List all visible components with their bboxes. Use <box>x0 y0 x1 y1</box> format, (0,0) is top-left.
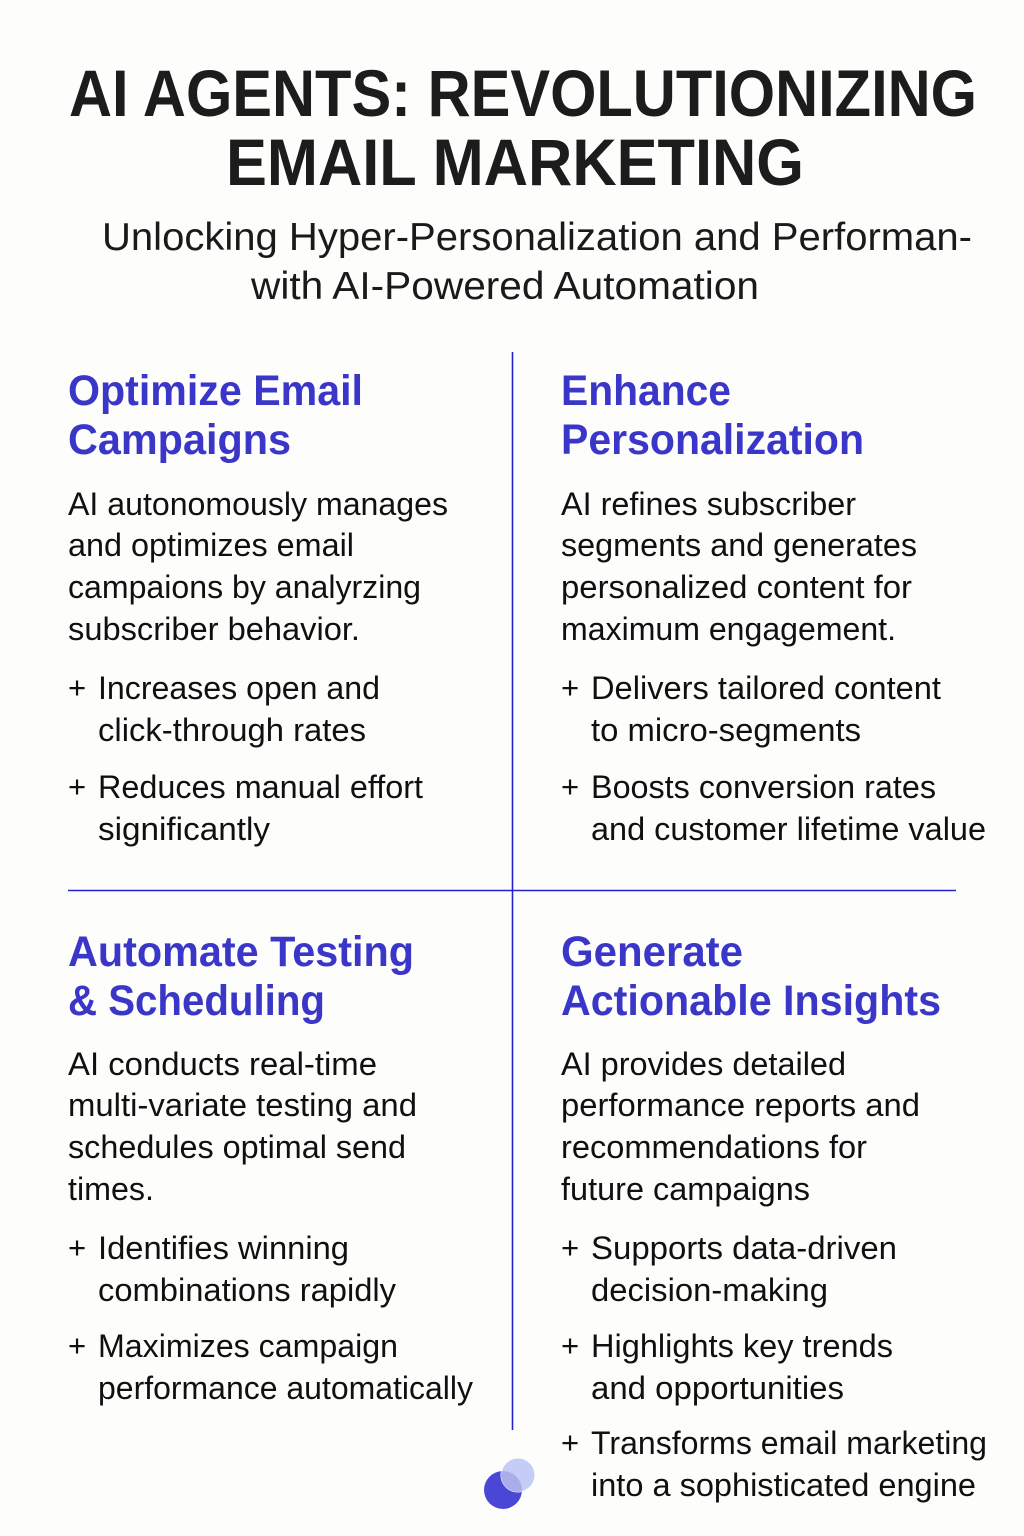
body text: segments and generates <box>561 527 917 563</box>
bullet: trends and opportunities <box>561 1328 893 1406</box>
bullet: sophisticated engine: Transforms email marketing <box>591 1425 987 1461</box>
bullet: winning combinations: combinations rapidly <box>98 1272 396 1308</box>
icon: overlapping circles logo <box>484 1458 535 1509</box>
bullet: data-driven decisions: decision-making <box>591 1272 828 1308</box>
bullet: reduces manual effort: significantly <box>98 811 270 847</box>
heading: generate actionable insights: Actionable Insights <box>561 977 941 1025</box>
body text: future campaigns <box>561 1171 810 1207</box>
bullet: data-driven decisions <box>561 1230 897 1308</box>
bullet: campaign performance: + <box>68 1328 86 1363</box>
bullet: campaign performance <box>68 1328 473 1406</box>
body text: and optimizes email <box>68 527 354 563</box>
bullet: sophisticated engine: + <box>561 1425 579 1460</box>
bullet: open and click-through rates: Increases open and <box>98 670 380 706</box>
heading: enhance personalization: Personalization <box>561 416 864 464</box>
subtitle: with AI-Powered Automation <box>250 265 759 308</box>
body text: subscriber behavior. <box>68 611 360 647</box>
body text <box>68 486 448 647</box>
title: EMAIL MARKETING <box>226 125 804 199</box>
bullet: trends and opportunities: Highlights key trends <box>591 1328 893 1364</box>
bullet: conversion rates: + <box>561 769 579 804</box>
bullet: sophisticated engine: into a sophisticated engine <box>591 1467 976 1503</box>
bullet: trends and opportunities: and opportunities <box>591 1370 844 1406</box>
subtitle: Unlocking Hyper-Personalization and Performan- <box>102 216 972 259</box>
body text <box>68 1046 417 1207</box>
body text: recommendations for <box>561 1129 867 1165</box>
body text: AI provides detailed <box>561 1046 846 1082</box>
heading: optimize email campaigns <box>68 367 363 464</box>
bullet: open and click-through rates <box>68 670 380 748</box>
bullet: trends and opportunities: + <box>561 1328 579 1363</box>
bullet: reduces manual effort: Reduces manual effort <box>98 769 423 805</box>
heading: automate testing and scheduling: & Scheduling <box>68 977 325 1025</box>
bullet: winning combinations: + <box>68 1230 86 1265</box>
panel: generate actionable insights <box>561 928 987 1503</box>
body text: performance reports and <box>561 1087 920 1123</box>
bullet: winning combinations: Identifies winning <box>98 1230 349 1266</box>
heading: optimize email campaigns: Campaigns <box>68 416 291 464</box>
bullet: data-driven decisions: Supports data-driven <box>591 1230 897 1266</box>
bullet: conversion rates <box>561 769 986 847</box>
bullet: conversion rates: and customer lifetime value <box>591 811 986 847</box>
heading: generate actionable insights: Generate <box>561 928 743 976</box>
body text <box>561 1046 920 1207</box>
body text <box>561 486 917 647</box>
bullet: conversion rates: Boosts conversion rates <box>591 769 936 805</box>
bullet: reduces manual effort <box>68 769 423 847</box>
heading: automate testing and scheduling: Automate Testing <box>68 928 414 976</box>
panel: optimize email campaigns <box>68 367 448 847</box>
subtitle <box>102 216 972 308</box>
body text: maximum engagement. <box>561 611 896 647</box>
bullet: campaign performance: performance automatically <box>98 1370 473 1406</box>
bullet: winning combinations <box>68 1230 396 1308</box>
bullet: data-driven decisions: + <box>561 1230 579 1265</box>
body text: times. <box>68 1171 154 1207</box>
heading: generate actionable insights <box>561 928 941 1025</box>
bullet: tailored content: Delivers tailored content <box>591 670 941 706</box>
bullet: campaign performance: Maximizes campaign <box>98 1328 398 1364</box>
body text: personalized content for <box>561 569 912 605</box>
bullet: open and click-through rates: click-through rates <box>98 712 366 748</box>
heading: automate testing and scheduling <box>68 928 414 1025</box>
bullet: tailored content <box>561 670 941 748</box>
heading: enhance personalization <box>561 367 864 464</box>
body text: AI refines subscriber <box>561 486 856 522</box>
heading: enhance personalization: Enhance <box>561 367 731 415</box>
title <box>69 56 977 199</box>
bullet: reduces manual effort: + <box>68 769 86 804</box>
body text: AI autonomously manages <box>68 486 448 522</box>
bullet: tailored content: to micro-segments <box>591 712 861 748</box>
bullet: tailored content: + <box>561 670 579 705</box>
heading: optimize email campaigns: Optimize Email <box>68 367 363 415</box>
panel: automate testing and scheduling <box>68 928 473 1406</box>
body text: schedules optimal send <box>68 1129 406 1165</box>
body text: campaions by analyrzing <box>68 569 421 605</box>
bullet: open and click-through rates: + <box>68 670 86 705</box>
panel: enhance personalization <box>561 367 986 847</box>
body text: multi-variate testing and <box>68 1087 417 1123</box>
bullet: sophisticated engine <box>561 1425 987 1503</box>
body text: AI conducts real-time <box>68 1046 377 1082</box>
